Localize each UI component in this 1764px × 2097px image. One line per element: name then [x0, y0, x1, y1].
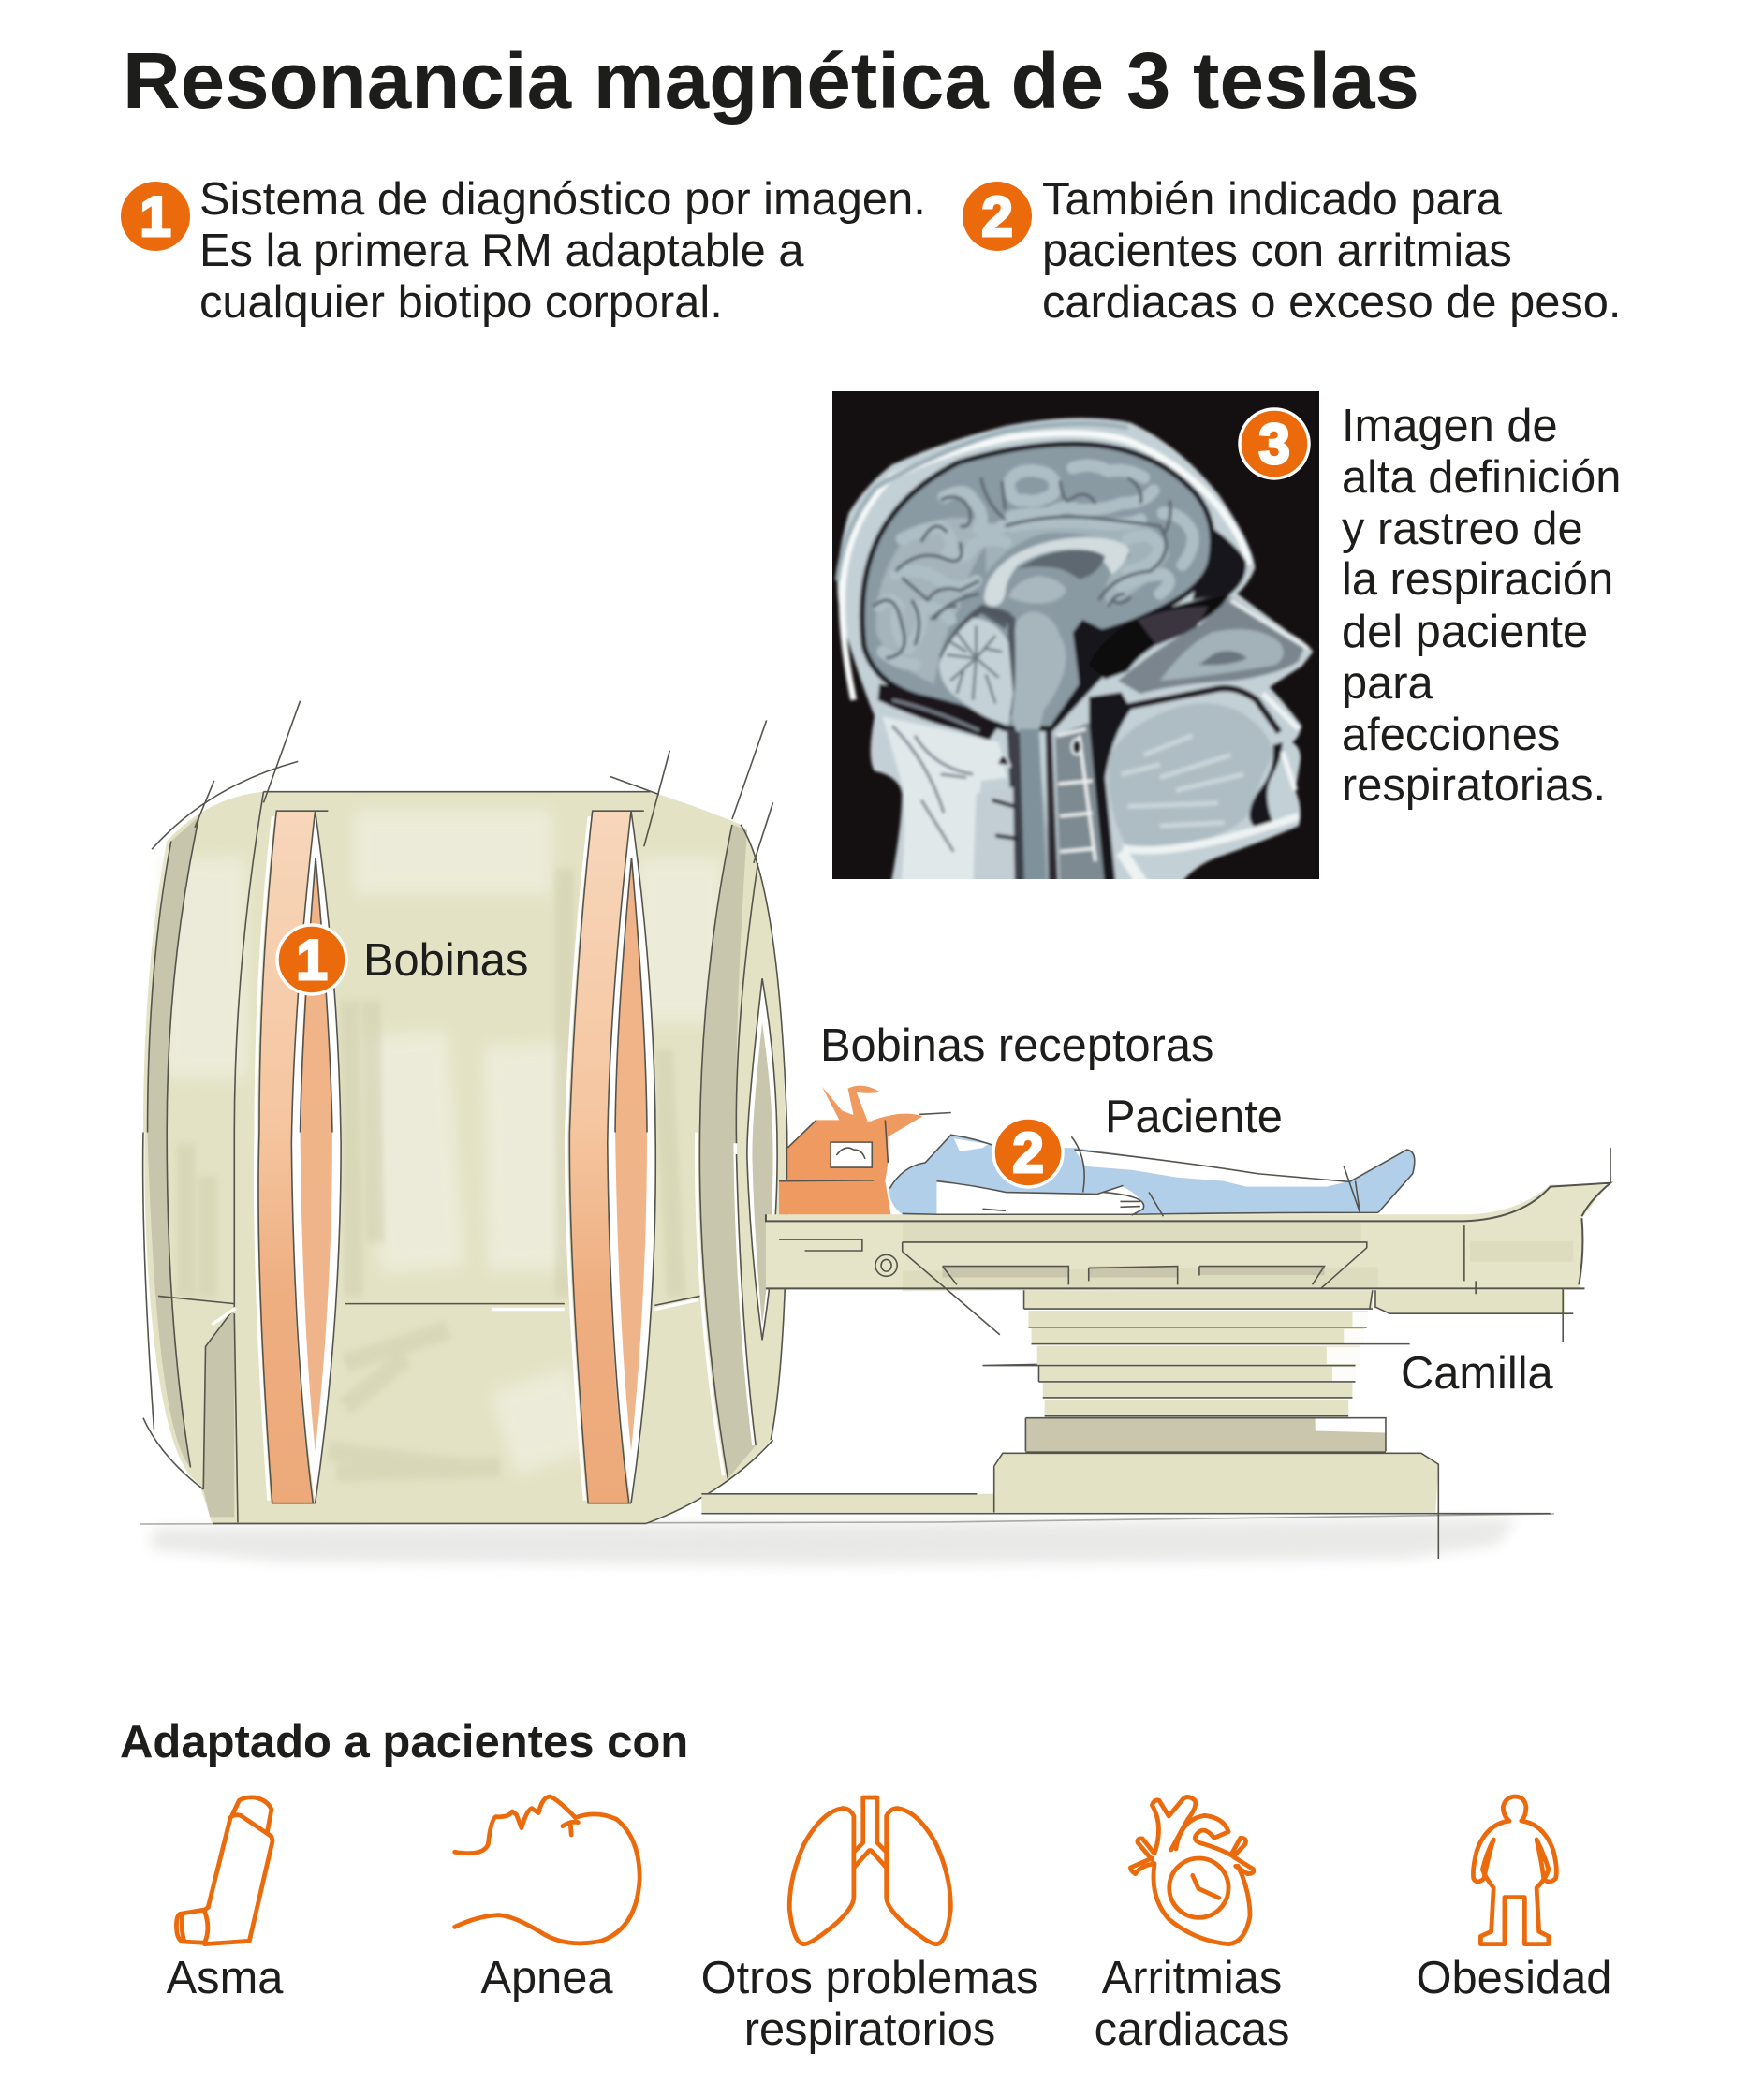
icon: head [455, 1796, 639, 1943]
MRI brain scan image [832, 391, 1319, 890]
scanner body [143, 792, 786, 1523]
watercolor strokes [203, 852, 681, 1462]
cerebellum [939, 618, 1013, 725]
body highlight [954, 1138, 1346, 1187]
intro block 2: cardiacas o exceso de peso. [1042, 277, 1621, 328]
ventricle [1018, 550, 1105, 579]
badge 2 on patient: 2 [1012, 1122, 1044, 1184]
rail to base [701, 1494, 1000, 1513]
bore [747, 978, 777, 1340]
coil 1 inner [301, 858, 332, 1451]
deck watercolor [903, 1233, 1573, 1281]
side text: respiratorias. [1342, 760, 1606, 811]
corpus callosum [984, 537, 1129, 606]
side text: para [1342, 658, 1434, 709]
label: Bobinas [277, 925, 528, 994]
vertebrae [1055, 723, 1105, 890]
under-tray [1375, 1290, 1565, 1313]
title: Resonancia magnética de 3 teslas [123, 37, 1419, 125]
left gray band [148, 816, 199, 1468]
icon: inhaler [176, 1797, 272, 1944]
heading: adapted: Adaptado a pacientes con [120, 1717, 688, 1767]
patient table [701, 1086, 1610, 1559]
patient [889, 1135, 1415, 1216]
badge 3 [1240, 409, 1309, 478]
floor shadow [140, 1514, 1554, 1565]
patient arm [936, 1181, 1143, 1215]
table base [994, 1453, 1438, 1513]
table deck [766, 1185, 1608, 1288]
pillar [1024, 1290, 1373, 1416]
badge 1: 1 [140, 185, 171, 248]
side text: la respiración [1342, 554, 1613, 605]
intro block 1: Es la primera RM adaptable a [199, 226, 804, 276]
label: Camilla: Camilla [1401, 1348, 1554, 1399]
label: Apnea: Apnea [480, 1953, 613, 2003]
scalp highlights [842, 433, 1249, 700]
label: Obesidad: Obesidad [1417, 1953, 1611, 2003]
pillar highlights [1327, 1312, 1369, 1382]
head silhouette [837, 418, 1313, 890]
badge 2: 2 [981, 185, 1013, 248]
side text: del paciente [1342, 607, 1588, 657]
label: Bobinas receptoras: Bobinas receptoras [820, 1020, 1213, 1071]
side text [1342, 401, 1621, 811]
label: Otros problemas respiratorios: respiratorios [744, 2004, 995, 2055]
label: Bobinas: Bobinas [363, 935, 528, 986]
icon: heart with clock [1130, 1797, 1254, 1944]
coil 2 inner [615, 858, 647, 1451]
scanner linework [143, 701, 787, 1523]
upper airway [1089, 594, 1231, 679]
label: Otros problemas respiratorios: Otros problemas [701, 1953, 1038, 2003]
side text: afecciones [1342, 710, 1560, 760]
neck tissue [883, 716, 1007, 890]
coil 1 outer [258, 811, 316, 1503]
intro block 2: pacientes con arritmias [1042, 226, 1512, 276]
badge 1 [121, 182, 190, 251]
oral cavity [1249, 742, 1283, 830]
side text: Imagen de [1342, 401, 1558, 451]
pharynx dark [1089, 692, 1131, 890]
receiver coil [779, 1086, 951, 1214]
badge 2 on patient [993, 1118, 1063, 1187]
badge 2 [963, 182, 1032, 251]
icon: obese person [1473, 1796, 1556, 1944]
badge 1 on scanner: 1 [296, 929, 328, 991]
badge 3: 3 [1258, 413, 1290, 476]
brain tissue [865, 447, 1210, 726]
intro block 1: Sistema de diagnóstico por imagen. [199, 174, 926, 225]
intro block 2 [963, 174, 1621, 328]
label: Arritmias cardiacas: cardiacas [1095, 2004, 1289, 2055]
nasal tissue [1118, 597, 1305, 694]
tentorium [942, 609, 1011, 716]
tongue [1109, 703, 1272, 848]
intro block 2: También indicado para [1042, 174, 1503, 225]
side text: y rastreo de [1342, 504, 1583, 554]
icon: lungs [789, 1797, 950, 1944]
intro block 1: cualquier biotipo corporal. [199, 277, 723, 328]
pillar dark collar [1025, 1418, 1386, 1451]
label: Arritmias cardiacas [1095, 1953, 1289, 2055]
intro block 1 [121, 174, 926, 328]
dark dural band [865, 447, 1210, 726]
right gray band [699, 825, 756, 1478]
white matter fill [875, 518, 999, 684]
coil 2 lens [608, 811, 655, 1503]
lips and chin [1123, 816, 1299, 850]
label: Asma: Asma [167, 1953, 284, 2003]
label: Otros problemas respiratorios [701, 1953, 1038, 2055]
label: Paciente [993, 1092, 1283, 1187]
slots [943, 1267, 1324, 1277]
gyri [879, 465, 1193, 665]
coil 2 outer [569, 811, 631, 1503]
linework [701, 1148, 1610, 1559]
side text: alta definición [1342, 452, 1621, 503]
brainstem and cord [1011, 611, 1066, 890]
MRI scanner [143, 701, 787, 1523]
label: Arritmias cardiacas: Arritmias [1102, 1953, 1282, 2003]
badge 1 on scanner [277, 925, 346, 994]
coil 1 lens [291, 811, 341, 1503]
label: Paciente: Paciente [1105, 1092, 1283, 1142]
